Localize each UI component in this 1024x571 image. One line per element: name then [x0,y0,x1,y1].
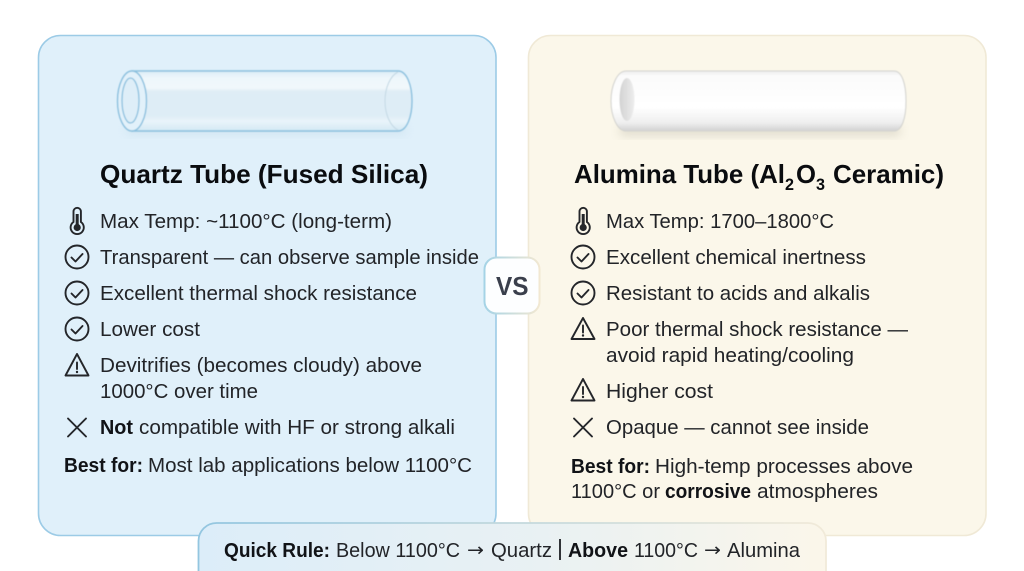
panel: quartz tube [38,36,496,536]
spec: devitrifies warning: Devitrifies (becomes cloudy) above [100,354,422,377]
badge: VS: VS [496,271,528,301]
spec: not compatible: Not [100,416,133,439]
best for: alumina: 1100°C or [571,480,660,503]
spec: opaque: Opaque — cannot see inside [606,416,869,439]
heading: alumina tube: 2 [785,175,794,194]
heading: alumina tube: O [796,159,816,189]
heading: alumina tube [574,159,944,194]
spec: thermal shock: Excellent thermal shock resistance [100,282,417,305]
callout: quick rule: Alumina [727,539,801,562]
heading: alumina tube: 3 [816,175,825,194]
best for: quartz: Most lab applications below 1100°C [148,454,472,477]
spec: devitrifies warning [66,354,422,403]
spec: devitrifies warning: 1000°C over time [100,380,258,403]
best for: alumina [571,455,913,503]
callout: quick rule: 1100°C [634,539,698,562]
image: white ceramic alumina tube [611,71,906,135]
spec: chemical inertness: Excellent chemical inertness [606,246,866,269]
image: transparent quartz tube [118,71,412,134]
spec: higher cost warning: Higher cost [606,380,713,403]
best for: alumina: Best for: [571,455,650,478]
spec: acid resistance: Resistant to acids and alkalis [606,282,870,305]
heading: alumina tube: Alumina Tube (Al [574,159,785,189]
heading: quartz tube: Quartz Tube (Fused Silica) [100,159,428,189]
best for: quartz: Best for: [64,454,143,477]
best for: alumina: atmospheres [757,480,878,503]
spec: lower cost: Lower cost [100,318,200,341]
spec: max temp: Max Temp: 1700–1800°C [606,210,834,233]
callout: quick rule: → [704,540,721,561]
callout: quick rule: Above [568,539,628,562]
spec: not compatible: compatible with HF or strong alkali [139,416,455,439]
spec: poor thermal shock warning: Poor thermal shock resistance — [606,318,908,341]
badge: VS [484,258,540,314]
callout: quick rule [198,523,826,571]
spec: poor thermal shock warning: avoid rapid heating/cooling [606,344,854,367]
callout: quick rule: Quick Rule: [224,539,330,562]
best for: alumina: High-temp processes above [655,455,913,478]
heading: alumina tube: Ceramic) [833,159,944,189]
panel: alumina tube [528,36,986,536]
spec: max temp: Max Temp: ~1100°C (long-term) [100,210,392,233]
callout: quick rule: Below 1100°C [336,539,460,562]
callout: quick rule: Quartz [491,539,552,562]
spec: poor thermal shock warning [572,318,908,367]
callout: quick rule: → [467,540,484,561]
best for: alumina: corrosive [665,480,751,503]
spec: transparent: Transparent — can observe sample inside [100,246,479,269]
